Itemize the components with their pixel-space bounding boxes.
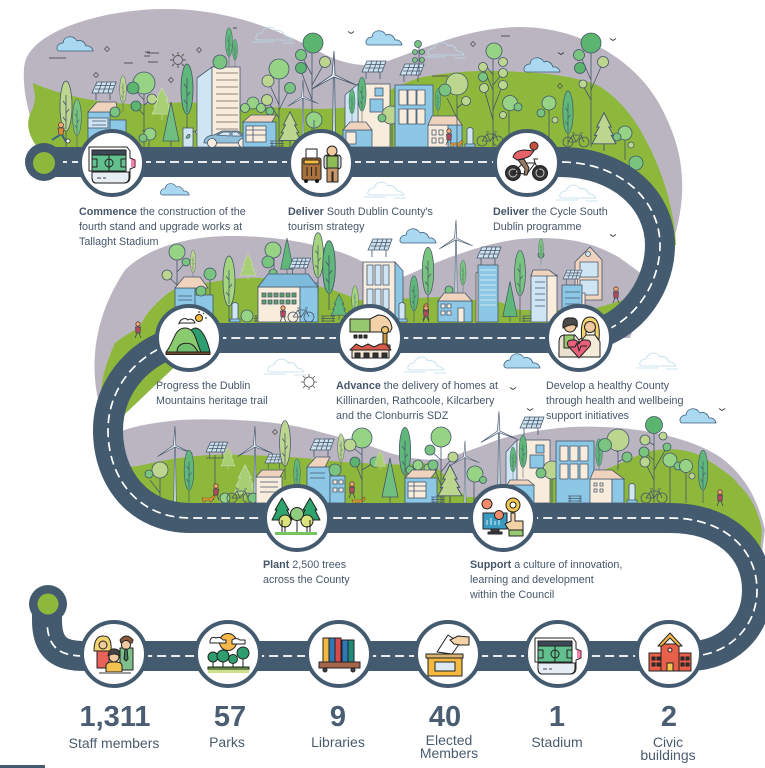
text: delivery of homes: Killinarden, Rathcoole, Kilcarbery — [336, 395, 495, 407]
stat: elected members: Members — [420, 745, 478, 761]
text: stadium milestone: fourth stand and upgrade works at — [79, 221, 242, 233]
text: delivery of homes: Advance the delivery of homes at — [336, 380, 498, 392]
icon: stadium milestone — [80, 131, 144, 195]
icon: planted trees — [265, 486, 329, 550]
icon: innovation and learning — [471, 486, 535, 550]
stat: parks: Parks — [209, 734, 245, 750]
stat: elected members — [420, 701, 478, 761]
text: cycle programme: Deliver the Cycle South — [493, 206, 608, 218]
stat: stadium: 1 — [549, 701, 565, 733]
text: heritage trail: Mountains heritage trail — [156, 395, 268, 407]
stat: libraries — [311, 701, 365, 750]
stat: staff members: Staff members — [69, 735, 159, 751]
stat: stadium — [531, 701, 583, 750]
text: heritage trail: Progress the Dublin — [156, 380, 250, 392]
stat: elected members: Elected — [426, 732, 472, 748]
panel: top hillside background — [24, 9, 682, 245]
icon: couple with heart — [547, 306, 611, 370]
text: stadium milestone: Commence the construction of the — [79, 206, 246, 218]
stat: civic buildings — [640, 701, 696, 763]
panel: lower hillside background — [108, 419, 765, 590]
text: plant trees: across the County — [263, 574, 350, 586]
text: tourism strategy: Deliver South Dublin County's — [288, 206, 433, 218]
stat: staff members — [69, 701, 159, 751]
icon: mountains — [157, 306, 221, 370]
icon: family staff members — [82, 622, 146, 686]
icon: parks — [196, 622, 260, 686]
text: culture of innovation: within the Council — [469, 589, 554, 601]
decorative clouds below top road — [160, 182, 598, 201]
car — [204, 131, 250, 148]
text: culture of innovation: learning and development — [470, 574, 594, 586]
illustration: top streetscape with trees, buildings, turbines and car — [49, 27, 643, 170]
text: healthy county: through health and wellbeing — [546, 395, 683, 407]
icon: civic buildings — [637, 622, 701, 686]
icon: library books — [307, 622, 371, 686]
stat: parks — [209, 701, 246, 750]
stat: staff members: 1,311 — [80, 701, 150, 733]
stat: civic buildings: buildings — [640, 747, 696, 763]
stat: civic buildings: 2 — [661, 701, 677, 733]
text: plant trees: Plant 2,500 trees — [263, 559, 346, 571]
stat: elected members: 40 — [429, 701, 461, 733]
road start marker — [25, 143, 63, 181]
runner icon: footballer — [52, 122, 70, 143]
text: culture of innovation: Support a culture of innovation, — [470, 559, 622, 571]
stat: libraries: 9 — [330, 701, 346, 733]
stat: parks: 57 — [214, 701, 246, 733]
text: tourism strategy: tourism strategy — [288, 221, 365, 233]
large blue-roofed building — [258, 274, 318, 322]
stat: civic buildings: Civic — [653, 734, 683, 750]
road: winding route — [44, 162, 757, 656]
text: stadium milestone: Tallaght Stadium — [79, 236, 159, 248]
text: healthy county: Develop a healthy County — [546, 380, 669, 392]
panel: middle hillside background — [95, 236, 650, 430]
icon: ballot box for elected members — [416, 622, 480, 686]
stat: libraries: Libraries — [311, 734, 365, 750]
illustration: lower streetscape with turbines, solar lamp and offices — [145, 374, 723, 506]
text: delivery of homes: and the Clonburris SDZ — [336, 410, 449, 422]
text: cycle programme: Dublin programme — [493, 221, 581, 233]
text: healthy county: support initiatives — [546, 410, 629, 422]
icon: hand with house key — [338, 306, 402, 370]
road end marker — [29, 585, 67, 623]
illustration: middle streetscape with housing, towers and turbine — [135, 220, 725, 423]
icon: tourist with luggage — [289, 131, 353, 195]
stat: stadium: Stadium — [531, 734, 583, 750]
icon: stadium — [526, 622, 590, 686]
tower block — [197, 67, 240, 147]
icon: cyclist — [495, 131, 559, 195]
